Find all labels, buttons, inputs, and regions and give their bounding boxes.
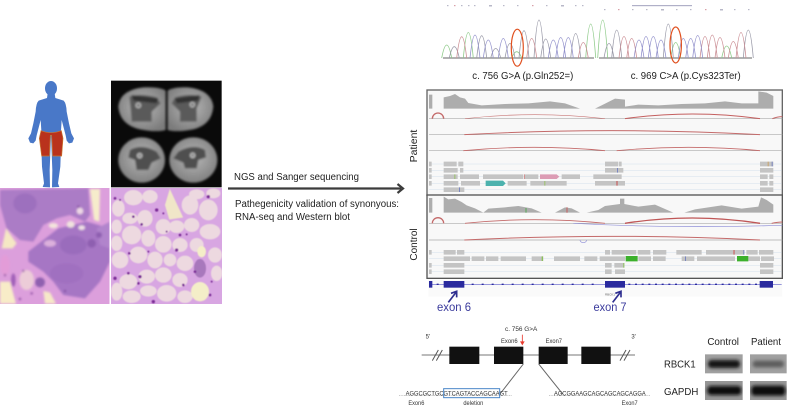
panel: histology, fatty replacement of muscle (111, 188, 222, 304)
text: pathogenicity validation (235, 199, 399, 223)
blot labels: GAPDH (664, 387, 698, 398)
diagram: RBCK1 gene structure with deletion: 3' (631, 335, 636, 341)
splice arcs: patient (429, 113, 782, 151)
blot: RBCK1 (705, 354, 787, 374)
diagram: RBCK1 gene structure with deletion: AGGCGCTGCGTCAGTACCAGCAAGT (406, 391, 508, 397)
arrow: exon 7 pointer (613, 291, 621, 302)
gene model track with exon labels: RBCK1 (605, 292, 615, 296)
blot labels: Patient (751, 337, 781, 348)
gene model track with exon labels (428, 280, 782, 297)
chart: Western blot (664, 337, 787, 401)
blot: GAPDH (705, 380, 787, 401)
panel: patient RNA-seq tracks (427, 90, 782, 195)
diagram: RBCK1 gene structure with deletion: Exon6 (501, 339, 518, 345)
chromatogram base ticks (447, 5, 750, 10)
label: exon 6: exon 6 (437, 302, 471, 314)
diagram: RBCK1 gene structure with deletion: c. 756 G>A (505, 326, 538, 333)
label: Patient: Patient (408, 130, 420, 162)
label: exon 7: exon 7 (594, 302, 626, 314)
blot labels: Control (707, 337, 739, 348)
text: pathogenicity validation: RNA-seq and Western blot (235, 212, 350, 223)
panel: control RNA-seq tracks (427, 195, 782, 278)
icon: human body with affected thigh muscles (28, 81, 74, 187)
label: c.756 G>A: c. 756 G>A (p.Gln252=) (472, 71, 573, 82)
label: c.969 C>A: c. 969 C>A (p.Cys323Ter) (631, 71, 741, 82)
text: sequencing method: NGS and Sanger sequencing (234, 172, 359, 183)
diagram: RBCK1 gene structure with deletion: AGCGGAAGCAGCAGCAGCAGGA (554, 391, 646, 397)
diagram: RBCK1 gene structure with deletion: Exon7 (546, 339, 563, 345)
label: Control: Control (409, 228, 420, 261)
arrow: workflow arrow (228, 184, 403, 193)
chart: Sanger chromatogram c.756 G>A (442, 20, 596, 58)
text: pathogenicity validation: Pathegenicity validation of synonyous: (235, 199, 399, 210)
panel: histology, muscle with clustered fibres (0, 188, 110, 304)
arrow: exon 6 pointer (448, 291, 457, 302)
blot labels (664, 337, 781, 398)
coverage: control (429, 197, 773, 213)
coverage: patient (429, 91, 773, 109)
diagram: RBCK1 gene structure with deletion (399, 326, 650, 405)
diagram: RBCK1 gene structure with deletion: 5' (426, 335, 430, 341)
blot labels: RBCK1 (664, 360, 696, 371)
splice arcs: control (429, 218, 782, 243)
callout: variant circle right (670, 27, 681, 63)
chart: Sanger chromatogram c.969 C>A (598, 20, 753, 58)
panel: thigh MRI (111, 81, 222, 187)
reads: control (429, 252, 782, 272)
callout: variant circle left (511, 29, 523, 66)
reads: patient (429, 164, 782, 190)
